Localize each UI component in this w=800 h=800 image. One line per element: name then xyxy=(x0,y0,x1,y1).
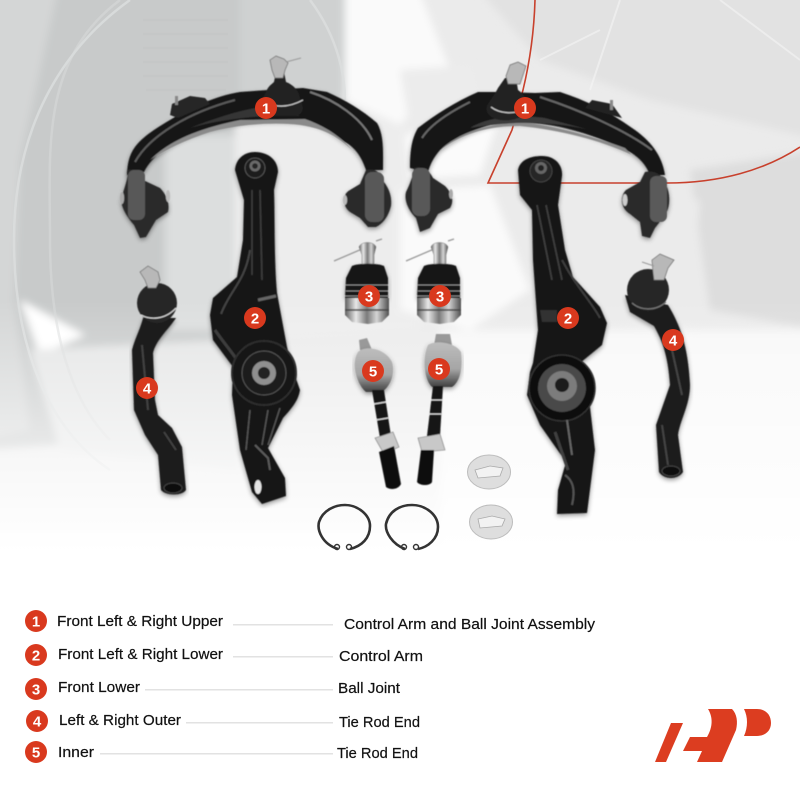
legend row 2 xyxy=(25,644,423,666)
legend row 2: 2 xyxy=(32,648,40,664)
part: right retaining ring xyxy=(386,505,438,550)
legend row 3: Ball Joint xyxy=(338,680,401,697)
arm body xyxy=(410,92,665,175)
badge 3 left: 3 xyxy=(365,288,373,306)
legend row 1: 1 xyxy=(32,614,40,630)
right bushing xyxy=(344,170,391,227)
stud xyxy=(270,56,288,78)
ball joint xyxy=(486,78,528,120)
part: right upper control arm xyxy=(405,62,669,238)
legend row 3: Front Lower xyxy=(58,679,140,696)
badge 5 left: 5 xyxy=(369,364,377,380)
badge 3 left xyxy=(358,285,380,307)
part: right inner tie rod xyxy=(417,334,462,485)
legend row 2: Front Left & Right Lower xyxy=(58,646,223,663)
part: left inner tie rod xyxy=(355,338,401,489)
badge 1 right xyxy=(514,97,536,119)
legend row 4: 4 xyxy=(33,714,42,730)
callout badges on parts xyxy=(136,97,684,399)
right bushing xyxy=(622,172,669,238)
legend row 1: Front Left & Right Upper xyxy=(57,613,223,630)
part: left ball joint xyxy=(334,239,389,324)
legend row 4 xyxy=(26,710,420,732)
badge 5 left xyxy=(362,360,384,382)
ball joint xyxy=(259,72,303,116)
part: upper washer xyxy=(468,455,510,489)
background: faded suspension photo xyxy=(0,0,800,632)
part: right outer tie rod end xyxy=(625,254,690,478)
left bushing xyxy=(405,167,452,232)
badge 2 left: 2 xyxy=(251,310,259,328)
left bushing xyxy=(121,169,169,238)
part: right lower control arm xyxy=(518,156,607,514)
badge 5 right xyxy=(428,358,450,380)
badge 4 right xyxy=(662,329,684,351)
legend row 4: Tie Rod End xyxy=(339,714,420,731)
badge 2 left xyxy=(244,307,266,329)
part: left retaining ring xyxy=(319,505,370,550)
legend row 1: Control Arm and Ball Joint Assembly xyxy=(344,616,596,633)
badge 1 left: 1 xyxy=(262,100,270,118)
badge 4 left: 4 xyxy=(143,380,152,398)
legend row 2: Control Arm xyxy=(339,648,423,665)
legend row 3: 3 xyxy=(32,682,40,698)
badge 4 right: 4 xyxy=(669,332,678,350)
parts legend xyxy=(25,610,596,763)
decorative red arc xyxy=(488,0,800,183)
badge 4 left xyxy=(136,377,158,399)
arm body xyxy=(127,88,383,175)
legend row 5: 5 xyxy=(32,744,40,762)
badge 2 right: 2 xyxy=(564,310,572,328)
part: right ball joint xyxy=(406,239,461,324)
part: lower washer xyxy=(470,505,512,539)
part: left outer tie rod end xyxy=(132,266,186,494)
badge 3 right xyxy=(429,285,451,307)
legend row 1 xyxy=(25,610,596,633)
badge 3 right: 3 xyxy=(436,288,444,306)
part: left lower control arm xyxy=(210,152,300,504)
stud xyxy=(506,62,526,84)
badge 1 right: 1 xyxy=(521,100,529,118)
badge 2 right xyxy=(557,307,579,329)
legend row 5: Tie Rod End xyxy=(337,745,418,762)
logo: A-Premium mark xyxy=(655,709,771,762)
legend row 5: Inner xyxy=(58,744,94,761)
badge 1 left xyxy=(255,97,277,119)
legend row 3 xyxy=(25,678,401,700)
badge 5 right: 5 xyxy=(435,362,443,378)
part: left upper control arm xyxy=(120,56,391,238)
legend row 5 xyxy=(25,741,418,763)
legend row 4: Left & Right Outer xyxy=(59,712,181,729)
